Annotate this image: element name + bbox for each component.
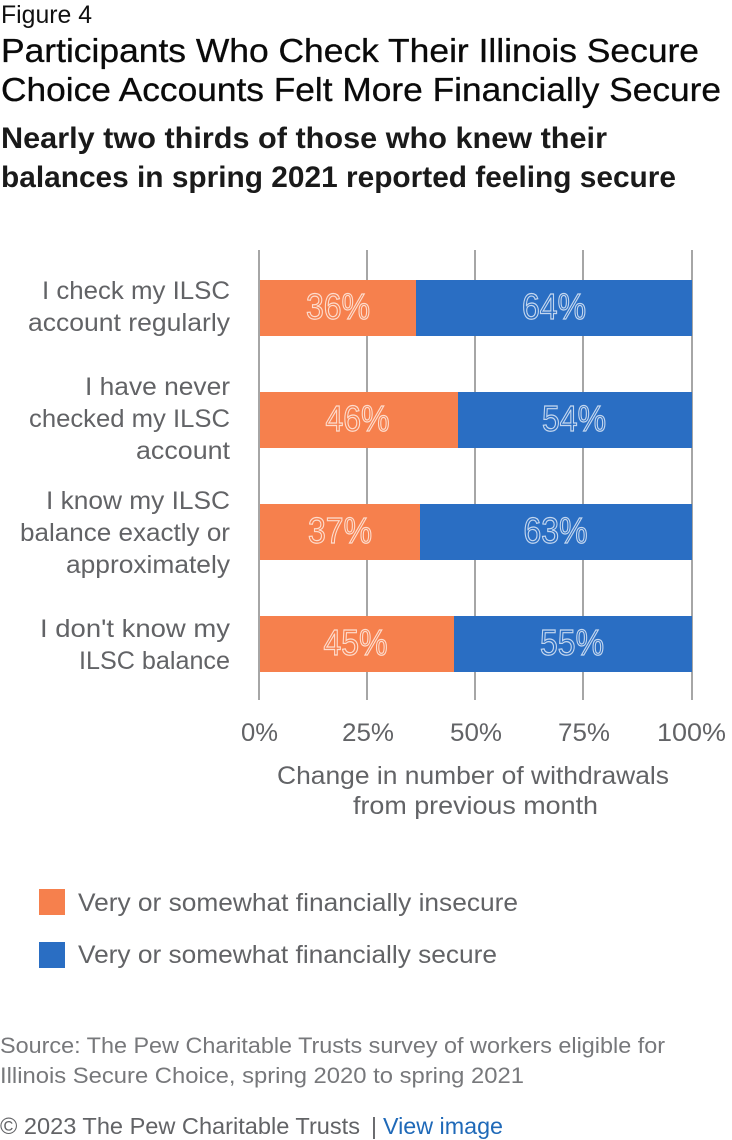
x axis title: Change in number of withdrawals <box>277 762 669 790</box>
category labels: ILSC balance <box>79 647 230 675</box>
title <box>1 32 721 108</box>
subtitle: balances in spring 2021 reported feeling secure <box>1 161 676 194</box>
bar row 4: 45% <box>324 622 388 663</box>
source note <box>0 1033 665 1088</box>
subtitle: Nearly two thirds of those who knew their <box>1 122 607 155</box>
bar row 4: 55% <box>540 622 604 663</box>
grid lines <box>259 250 692 700</box>
bar row 3: 37% <box>308 510 372 551</box>
category labels: checked my ILSC <box>29 405 230 433</box>
copyright and link: View image <box>383 1113 503 1139</box>
bar row 4 <box>260 616 692 672</box>
x axis labels <box>241 719 726 747</box>
x axis labels: 75% <box>558 719 610 747</box>
copyright and link <box>0 1113 503 1139</box>
bar row 2 <box>260 392 692 448</box>
x axis title <box>277 762 669 820</box>
source note: Source: The Pew Charitable Trusts survey of workers eligible for <box>0 1033 665 1058</box>
bar row 3 <box>260 504 692 560</box>
bar row 3: 63% <box>524 510 588 551</box>
bar row 1 <box>260 280 692 336</box>
x axis title: from previous month <box>353 792 598 820</box>
x axis labels: 50% <box>450 719 502 747</box>
subtitle <box>1 122 676 194</box>
legend <box>39 889 518 969</box>
bar row 1: 64% <box>522 286 586 327</box>
category labels: I know my ILSC <box>46 487 230 515</box>
category labels: I have never <box>85 373 230 401</box>
bar row 1: 36% <box>306 286 370 327</box>
category labels: I check my ILSC <box>42 277 230 305</box>
title: Choice Accounts Felt More Financially Secure <box>1 71 721 108</box>
legend: insecure: Very or somewhat financially insecure <box>78 889 518 917</box>
stacked bars <box>260 280 692 672</box>
category labels: approximately <box>66 551 231 579</box>
legend: secure: Very or somewhat financially secure <box>78 941 497 969</box>
figure label: Figure 4 <box>1 1 92 29</box>
copyright and link: | <box>371 1113 377 1139</box>
x axis labels: 0% <box>241 719 278 747</box>
category labels: account <box>136 437 230 465</box>
category labels: account regularly <box>28 309 231 337</box>
category labels <box>20 277 231 675</box>
title: Participants Who Check Their Illinois Secure <box>1 32 699 69</box>
copyright and link: © 2023 The Pew Charitable Trusts <box>0 1113 360 1139</box>
bar row 2: 46% <box>326 398 390 439</box>
category labels: I don't know my <box>40 615 231 643</box>
bar row 2: 54% <box>542 398 606 439</box>
source note: Illinois Secure Choice, spring 2020 to spring 2021 <box>0 1063 524 1088</box>
x axis labels: 25% <box>342 719 394 747</box>
category labels: balance exactly or <box>20 519 230 547</box>
x axis labels: 100% <box>657 719 726 747</box>
